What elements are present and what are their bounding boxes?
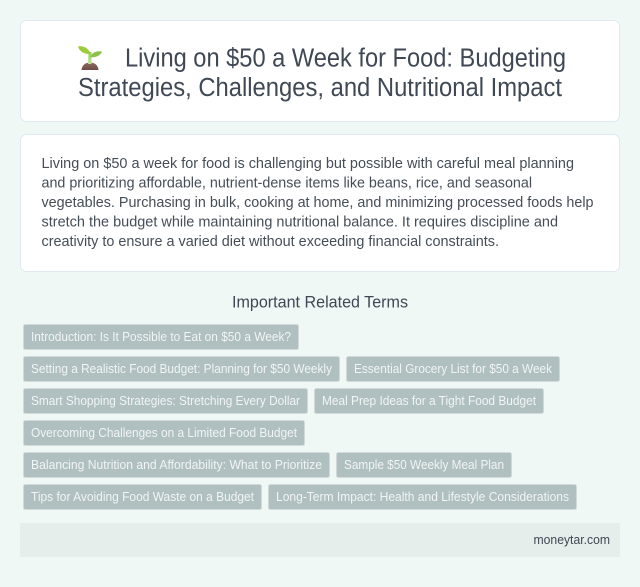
- tag: [346, 356, 560, 382]
- tag: Balancing Nutrition and Affordability: What to Prioritize: [31, 457, 322, 472]
- title text: Strategies, Challenges, and Nutritional Impact: [78, 74, 562, 102]
- panel: title card: [20, 20, 620, 122]
- title text: [78, 45, 566, 102]
- tag: Setting a Realistic Food Budget: Planning for $50 Weekly: [31, 361, 332, 376]
- tag: Overcoming Challenges on a Limited Food Budget: [31, 425, 297, 440]
- tag: [268, 484, 576, 510]
- panel: description: [20, 134, 620, 272]
- tag: Introduction: Is It Possible to Eat on $50 a Week?: [31, 329, 291, 344]
- tag: [24, 356, 340, 382]
- tag: Essential Grocery List for $50 a Week: [354, 361, 552, 376]
- tag: Tips for Avoiding Food Waste on a Budget: [31, 489, 254, 504]
- tag: [24, 324, 298, 350]
- description text: [42, 155, 594, 250]
- tag: [24, 388, 308, 414]
- footer: [20, 523, 620, 557]
- tag: Long-Term Impact: Health and Lifestyle Considerations: [276, 489, 569, 504]
- tag list: [24, 324, 576, 510]
- footer source text: moneytar.com: [534, 532, 610, 547]
- tag: [24, 484, 262, 510]
- tag: [336, 452, 512, 478]
- tag: [24, 420, 304, 446]
- title text: Living on $50 a Week for Food: Budgeting: [125, 45, 566, 73]
- description text: Living on $50 a week for food is challenging but possible with careful meal planning: [42, 155, 574, 172]
- icon: sprout: [78, 46, 102, 70]
- tag: Sample $50 Weekly Meal Plan: [344, 457, 504, 472]
- description text: vegetables. Purchasing in bulk, cooking at home, and minimizing processed foods help: [42, 194, 594, 211]
- tag: [24, 452, 330, 478]
- tag: [314, 388, 544, 414]
- tag: Smart Shopping Strategies: Stretching Every Dollar: [31, 393, 301, 408]
- tag: Meal Prep Ideas for a Tight Food Budget: [322, 393, 536, 408]
- heading: important related terms: Important Related Terms: [232, 294, 408, 312]
- description text: and prioritizing affordable, nutrient-dense items like beans, rice, and seasonal: [42, 174, 532, 192]
- description text: creativity to ensure a varied diet without exceeding financial constraints.: [42, 233, 499, 250]
- description text: stretch the budget while maintaining nutritional balance. It requires discipline and: [42, 214, 558, 230]
